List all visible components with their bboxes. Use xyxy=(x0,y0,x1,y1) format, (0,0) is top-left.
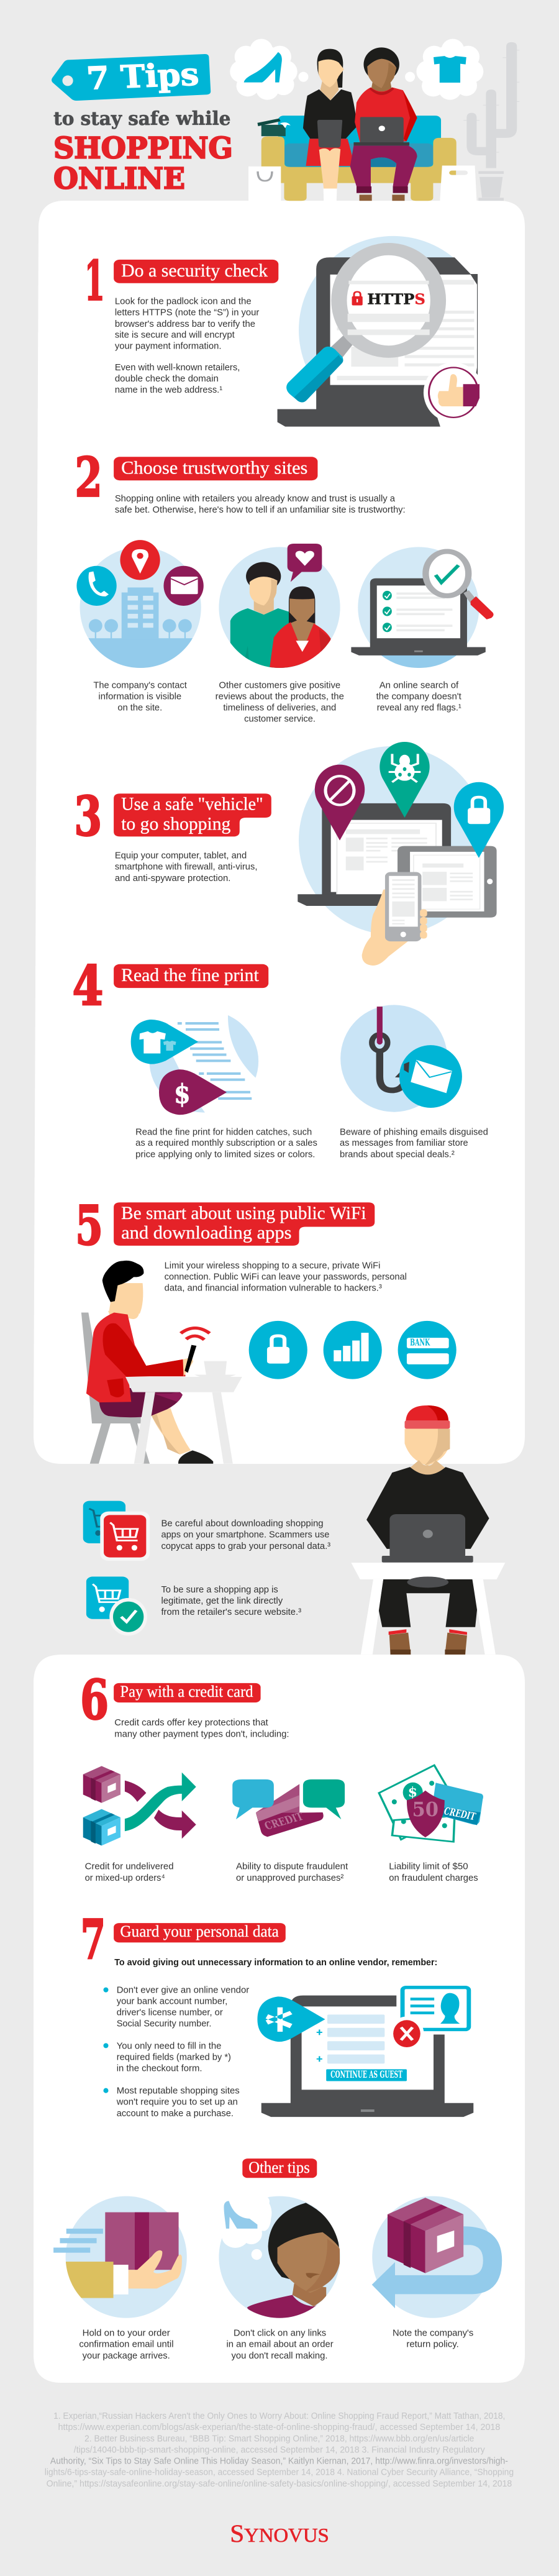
sofa xyxy=(261,116,457,201)
bullet list: Social Security number. xyxy=(117,2018,211,2029)
other tip: return policy xyxy=(372,2196,502,2318)
captions for the three checks xyxy=(93,680,461,724)
table xyxy=(125,1377,242,1392)
illustration: checkout form on laptop: CONTINUE AS GUEST xyxy=(330,2069,402,2081)
continue as guest button xyxy=(326,2069,407,2081)
body text: and anti-spyware protection. xyxy=(115,872,230,883)
shopping bag right xyxy=(440,166,476,201)
shopping bag left xyxy=(248,167,281,201)
text: legitimate apps: from the retailer's secure website.³ xyxy=(161,1606,301,1617)
illustration: boxes swapped xyxy=(83,1766,196,1846)
heading pill xyxy=(114,1202,375,1246)
title line: to stay safe while: to stay safe while xyxy=(53,108,230,130)
other tips heading pill: Other tips xyxy=(248,2158,310,2176)
leg xyxy=(152,1408,191,1455)
heading pill: Be smart about using public WiFi xyxy=(121,1203,366,1223)
body text: Equip your computer, tablet, and xyxy=(115,850,247,861)
heading pill: to go shopping xyxy=(121,814,230,834)
bullet list: driver's license number, or xyxy=(117,2007,223,2017)
woman with tablet xyxy=(303,49,357,201)
bullet list: You only need to fill in the xyxy=(117,2040,221,2051)
magnifier with check xyxy=(425,551,494,619)
captions: Credit for undelivered xyxy=(85,1861,174,1871)
number 5: 5 xyxy=(75,1194,103,1258)
captions for the three checks: Other customers give positive xyxy=(219,680,340,690)
title line: online: ONLINE xyxy=(53,162,185,196)
jacket xyxy=(86,1312,185,1402)
text: legitimate apps: To be sure a shopping app is xyxy=(161,1584,278,1594)
body text: many other payment types don't, including: xyxy=(114,1729,289,1739)
body text xyxy=(115,850,257,883)
captions: or mixed-up orders⁴ xyxy=(85,1872,165,1883)
hand holding phone xyxy=(362,872,427,966)
icon: bank card xyxy=(398,1321,457,1379)
number 4: 4 xyxy=(73,953,103,1018)
body text: name in the web address.¹ xyxy=(115,384,222,395)
bullet list: in the checkout form. xyxy=(117,2063,202,2073)
heading pill: Use a safe "vehicle" xyxy=(121,793,263,814)
other tips captions xyxy=(79,2327,473,2360)
illustration: phishing hook xyxy=(340,1005,462,1112)
body text xyxy=(114,1717,289,1739)
other tip: suspicious link xyxy=(219,2190,340,2319)
bullet list xyxy=(103,1985,249,2118)
teardrop with asterisk xyxy=(257,1996,325,2042)
arrow green xyxy=(125,1773,196,1831)
body text: safe bet. Otherwise, here's how to tell if an unfamiliar site is trustworthy: xyxy=(115,504,406,514)
footnotes xyxy=(45,2411,514,2488)
icon: map pin xyxy=(120,540,160,580)
thought bubble: shoe xyxy=(230,39,309,100)
purple box xyxy=(83,1766,120,1803)
padlock xyxy=(352,292,363,305)
captions for the three checks: the company doesn't xyxy=(376,691,461,701)
body text: site is secure and will encrypt xyxy=(115,329,235,340)
pin: dollar sign xyxy=(159,1069,227,1115)
illustration: liability limit shield: $ xyxy=(408,1784,417,1800)
captions for the three checks: customer service. xyxy=(244,713,316,724)
heading pill xyxy=(114,793,271,836)
Synovus logo: SYNOVUS xyxy=(230,2519,329,2547)
hand and phone xyxy=(183,1358,193,1376)
captions for the three checks: reviews about the products, the xyxy=(216,691,344,701)
icon: lock xyxy=(249,1321,307,1379)
heading pill: Guard your personal data xyxy=(120,1922,279,1940)
tip 1: do a security check xyxy=(84,236,492,427)
pin: blocked xyxy=(315,765,365,841)
captions: Liability limit of $50 xyxy=(389,1861,468,1871)
heading pill: Read the fine print xyxy=(121,965,259,985)
bullet list: Most reputable shopping sites xyxy=(117,2085,240,2096)
icon: phone xyxy=(76,566,117,606)
body text: your payment information. xyxy=(115,340,221,351)
other tips captions: Note the company's xyxy=(393,2327,473,2338)
title line: shopping: SHOPPING xyxy=(53,131,233,165)
captions: or unapproved purchases² xyxy=(236,1872,344,1883)
number 7: 7 xyxy=(81,1907,106,1971)
bullet list: required fields (marked by *) xyxy=(117,2052,231,2062)
speech bubble with heart xyxy=(288,544,322,582)
body text: connection. Public WiFi can leave your passwords, personal xyxy=(165,1271,407,1282)
captions: price applying only to limited sizes or colors. xyxy=(135,1149,315,1159)
blue box xyxy=(83,1809,120,1846)
bullet list: won't require you to set up an xyxy=(116,2096,238,2107)
tip 7: guard your personal data xyxy=(81,1907,473,2118)
tablet xyxy=(398,846,497,918)
other tips captions: Don't click on any links xyxy=(234,2327,326,2338)
body text: browser's address bar to verify the xyxy=(115,318,255,329)
heading pill: and downloading apps xyxy=(121,1222,292,1243)
envelope xyxy=(411,1060,452,1093)
HTTPS label: HTTPS xyxy=(367,291,425,308)
panel: tips 6, 7 and other tips xyxy=(34,1655,525,2383)
illustration: checkout form on laptop xyxy=(257,1988,473,2117)
icon: verified shopping app xyxy=(86,1576,147,1636)
heading pill: Choose trustworthy sites xyxy=(121,457,307,478)
tip 4: read the fine print xyxy=(73,953,488,1159)
icon: bank card: BANK xyxy=(410,1338,430,1348)
required markers xyxy=(317,2029,322,2062)
heading pill xyxy=(114,964,268,988)
laptop xyxy=(298,803,451,906)
captions for the three checks: information is visible xyxy=(98,691,181,701)
illustration: liability limit shield: CREDIT xyxy=(442,1806,477,1823)
body text xyxy=(115,493,406,514)
captions: as a required monthly subscription or a sales xyxy=(135,1137,317,1148)
bold lead-in: To avoid giving out unnecessary information to an online vendor, remember: xyxy=(114,1957,437,1967)
head and hair xyxy=(102,1261,143,1319)
captions for the three checks: An online search of xyxy=(379,680,458,690)
illustration: protected devices xyxy=(298,742,504,966)
body text: letters HTTPS (note the “S”) in your xyxy=(115,307,260,317)
illustration: contact information xyxy=(76,540,204,669)
other tips captions: confirmation email until xyxy=(79,2339,174,2349)
other tips captions: in an email about an order xyxy=(226,2339,334,2349)
shoe box xyxy=(257,119,291,136)
captions xyxy=(135,1126,488,1159)
thought bubble: t-shirt xyxy=(405,39,483,100)
body text: Look for the padlock icon and the xyxy=(115,296,252,306)
pin: bug xyxy=(379,742,430,818)
other tips captions: Hold on to your order xyxy=(83,2327,170,2338)
tip 5: public WiFi and apps xyxy=(75,1194,457,1464)
header illustration: couple shopping on sofa xyxy=(230,39,519,201)
price tag with 7 Tips xyxy=(52,54,211,101)
text: legitimate apps xyxy=(161,1584,301,1617)
captions: Read the fine print for hidden catches, such xyxy=(135,1126,312,1137)
chair xyxy=(81,1312,150,1464)
number 6: 6 xyxy=(80,1668,109,1732)
body text: Even with well-known retailers, xyxy=(115,362,240,372)
illustration: liability limit shield: 50 xyxy=(412,1797,439,1821)
tip 3: safe vehicle xyxy=(74,742,504,966)
other tip: package xyxy=(53,2196,187,2318)
thought cloud with shoe xyxy=(220,2190,271,2260)
illustration: magnifier over HTTPS page xyxy=(278,236,492,427)
other tips captions: your package arrives. xyxy=(83,2350,170,2360)
body text: double check the domain xyxy=(115,373,219,383)
illustration: customer reviews xyxy=(219,544,340,670)
bullet list: account to make a purchase. xyxy=(117,2108,234,2118)
icon: signal bars xyxy=(324,1321,382,1379)
captions for the three checks: timeliness of deliveries, and xyxy=(223,702,336,713)
cactus and pot xyxy=(463,42,519,201)
panel: tips 1 to 5 xyxy=(34,201,525,1464)
text: careful about apps: Be careful about downloading shopping xyxy=(161,1518,324,1528)
tip 6 heading block xyxy=(80,1668,289,1739)
captions: Ability to dispute fraudulent xyxy=(236,1861,348,1871)
pin: dollar sign: $ xyxy=(174,1078,191,1109)
thumbs up badge xyxy=(424,362,483,422)
shoe xyxy=(178,1450,213,1464)
heading pill: Pay with a credit card xyxy=(120,1683,253,1701)
pin: padlock xyxy=(454,782,504,858)
illustration: disputed credit card xyxy=(232,1779,345,1837)
body text: data, and financial information vulnerable to hackers.³ xyxy=(165,1282,382,1293)
header title xyxy=(52,54,233,196)
body text xyxy=(115,296,260,395)
number 3: 3 xyxy=(74,784,102,848)
captions: brands about special deals.² xyxy=(340,1149,455,1159)
text: careful about apps: copycat apps to grab your personal data.³ xyxy=(161,1540,330,1551)
body text: Limit your wireless shopping to a secure, private WiFi xyxy=(165,1260,380,1271)
body text: smartphone with firewall, anti-virus, xyxy=(115,861,257,872)
man with laptop xyxy=(350,47,417,201)
heading pill xyxy=(114,1683,261,1702)
text: legitimate apps: legitimate, get the link directly xyxy=(161,1595,283,1605)
number 2: 2 xyxy=(75,445,102,509)
captions: on fraudulent charges xyxy=(389,1872,478,1883)
bullet list: your bank account number, xyxy=(117,1996,227,2006)
tip 2: choose trustworthy sites xyxy=(75,445,494,724)
cup xyxy=(194,1361,236,1377)
captions for the three checks: on the site. xyxy=(117,702,162,713)
captions for the three checks: The company's contact xyxy=(93,680,187,690)
illustration: hacker at laptop xyxy=(351,1405,505,1655)
ID card xyxy=(402,1988,469,2029)
red cross badge xyxy=(389,2017,424,2051)
text: careful about apps xyxy=(161,1518,330,1551)
heading pill: Do a security check xyxy=(121,260,268,281)
body text xyxy=(165,1260,407,1293)
other tips captions: you don't recall making. xyxy=(232,2350,328,2360)
captions xyxy=(85,1861,478,1883)
illustration: online search xyxy=(351,547,494,668)
captions: as messages from familiar store xyxy=(340,1137,468,1148)
icon: copycat shopping apps xyxy=(83,1501,150,1561)
illustration: fine print xyxy=(131,1007,258,1115)
icon: envelope xyxy=(163,566,204,606)
captions: Beware of phishing emails disguised xyxy=(340,1126,488,1137)
illustration: liability limit shield xyxy=(379,1765,483,1842)
price tag with 7 Tips: 7 Tips xyxy=(85,56,200,97)
illustration: woman using public WiFi xyxy=(81,1261,457,1464)
illustration: disputed credit card: CREDIT xyxy=(262,1810,306,1832)
skirt xyxy=(99,1388,183,1417)
body text: Shopping online with retailers you already know and trust is usually a xyxy=(115,493,395,504)
body text: Credit cards offer key protections that xyxy=(114,1717,268,1728)
other tips captions: return policy. xyxy=(406,2339,459,2349)
text: careful about apps: apps on your smartphone. Scammers use xyxy=(161,1529,329,1540)
wifi signal xyxy=(181,1328,210,1340)
tip 1: do a security check: 1 xyxy=(84,249,105,313)
captions for the three checks: reveal any red flags.¹ xyxy=(377,702,461,713)
arrow purple xyxy=(125,1781,196,1838)
bullet list: Don't ever give an online vendor xyxy=(117,1985,249,1995)
pin: t-shirts xyxy=(131,1020,198,1064)
